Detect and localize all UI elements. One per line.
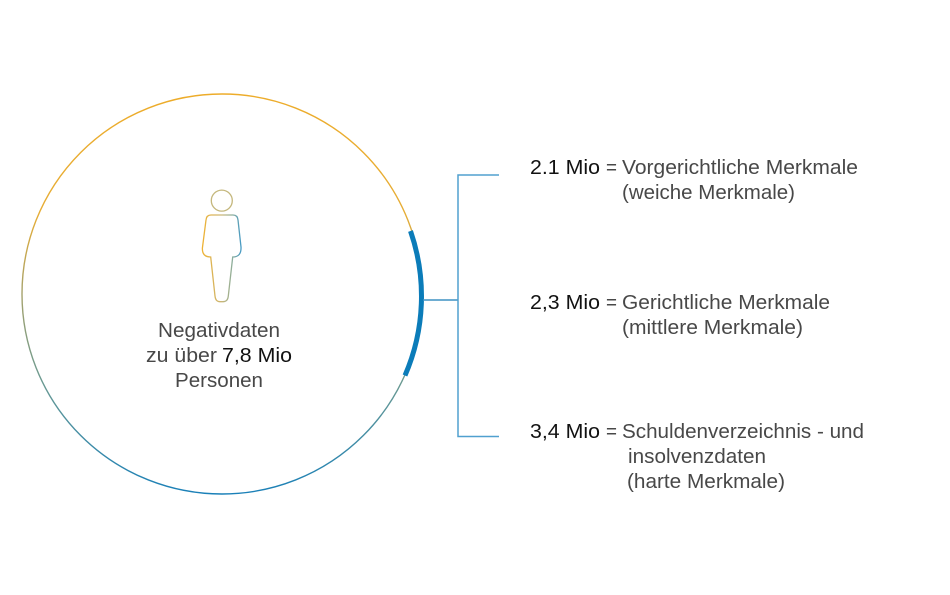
item: 2,3 Mio: 2,3 Mio	[530, 291, 600, 314]
item: 3,4 Mio: (harte Merkmale)	[627, 470, 785, 493]
item: 3,4 Mio: Schuldenverzeichnis - und	[622, 420, 864, 443]
item: 2.1 Mio	[530, 156, 858, 204]
item: 3,4 Mio: 3,4 Mio	[530, 420, 600, 443]
item: 2,3 Mio: (mittlere Merkmale)	[622, 316, 803, 339]
circle ring	[22, 94, 422, 494]
item: 2,3 Mio: Gerichtliche Merkmale	[622, 291, 830, 314]
item: 3,4 Mio: =	[606, 420, 617, 443]
highlighted arc	[405, 231, 421, 376]
item: 2.1 Mio: =	[606, 156, 617, 179]
item: 2.1 Mio: Vorgerichtliche Merkmale	[622, 156, 858, 179]
circle caption: 7,8 Mio	[222, 344, 292, 367]
bracket connector	[423, 175, 499, 436]
item: 2.1 Mio: 2.1 Mio	[530, 156, 600, 179]
circle caption: zu über	[146, 344, 217, 367]
icon: person	[202, 190, 241, 302]
circle caption	[146, 319, 292, 392]
item: 3,4 Mio	[530, 420, 864, 493]
item: 3,4 Mio: insolvenzdaten	[628, 445, 766, 468]
circle caption: Personen	[175, 369, 263, 392]
item: 2,3 Mio	[530, 291, 830, 339]
item: 2.1 Mio: (weiche Merkmale)	[622, 181, 795, 204]
item: 2,3 Mio: =	[606, 291, 617, 314]
circle caption: Negativdaten	[158, 319, 280, 342]
